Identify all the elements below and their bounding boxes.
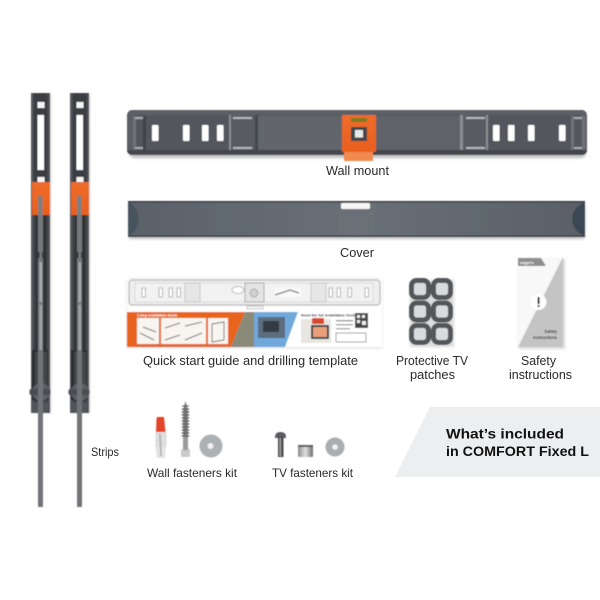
orange installation section [127,312,245,347]
full installation guide section: Need the full installation Guide? [301,314,360,318]
title text: in COMFORT Fixed L [446,444,589,459]
label: Safety instructions: instructions [509,368,572,382]
title text: What’s included [446,426,564,442]
spacer [298,445,313,457]
warning icon [530,294,546,310]
label: Cover: Cover [340,246,374,260]
washer [200,434,222,458]
mount slots [152,125,566,141]
orange lock [342,115,376,161]
wall fasteners kit [155,401,222,458]
quick start guide and drilling template [127,279,382,348]
title text [446,426,589,459]
orange installation section: 3 step installation Guide [137,314,178,318]
protective TV patches [410,280,454,347]
label: TV fasteners kit: TV fasteners kit [272,466,354,480]
safety instructions booklet: vogel's [520,260,534,265]
TV bolt [275,432,286,457]
template outline [129,280,380,309]
label: Wall mount: Wall mount [326,164,390,178]
label: Protective TV patches [396,354,469,382]
label: Protective TV patches: Protective TV [396,354,469,368]
wood screw [181,401,190,457]
cover [128,201,585,239]
strip left [30,93,51,507]
safety instructions booklet: instructions [533,335,558,340]
label: Strips: Strips [91,445,119,459]
label: Wall fasteners kit: Wall fasteners kit [147,466,238,480]
label: Protective TV patches: patches [410,368,455,382]
title panel [395,407,600,477]
cover slot [341,203,370,209]
label: Safety instructions [509,354,572,382]
strip right [68,93,90,507]
TV fasteners kit [275,432,344,457]
wall mount [127,110,587,161]
infographic canvas [28,92,600,508]
safety instructions booklet [517,257,565,349]
full installation guide section [301,313,368,343]
safety instructions booklet: Safety [544,329,558,334]
label: Quick start guide and drilling template: Quick start guide and drilling template [143,354,358,368]
photo section [231,312,298,347]
washer [326,438,344,456]
wall plug [155,417,166,458]
label: Safety instructions: Safety [521,354,557,368]
